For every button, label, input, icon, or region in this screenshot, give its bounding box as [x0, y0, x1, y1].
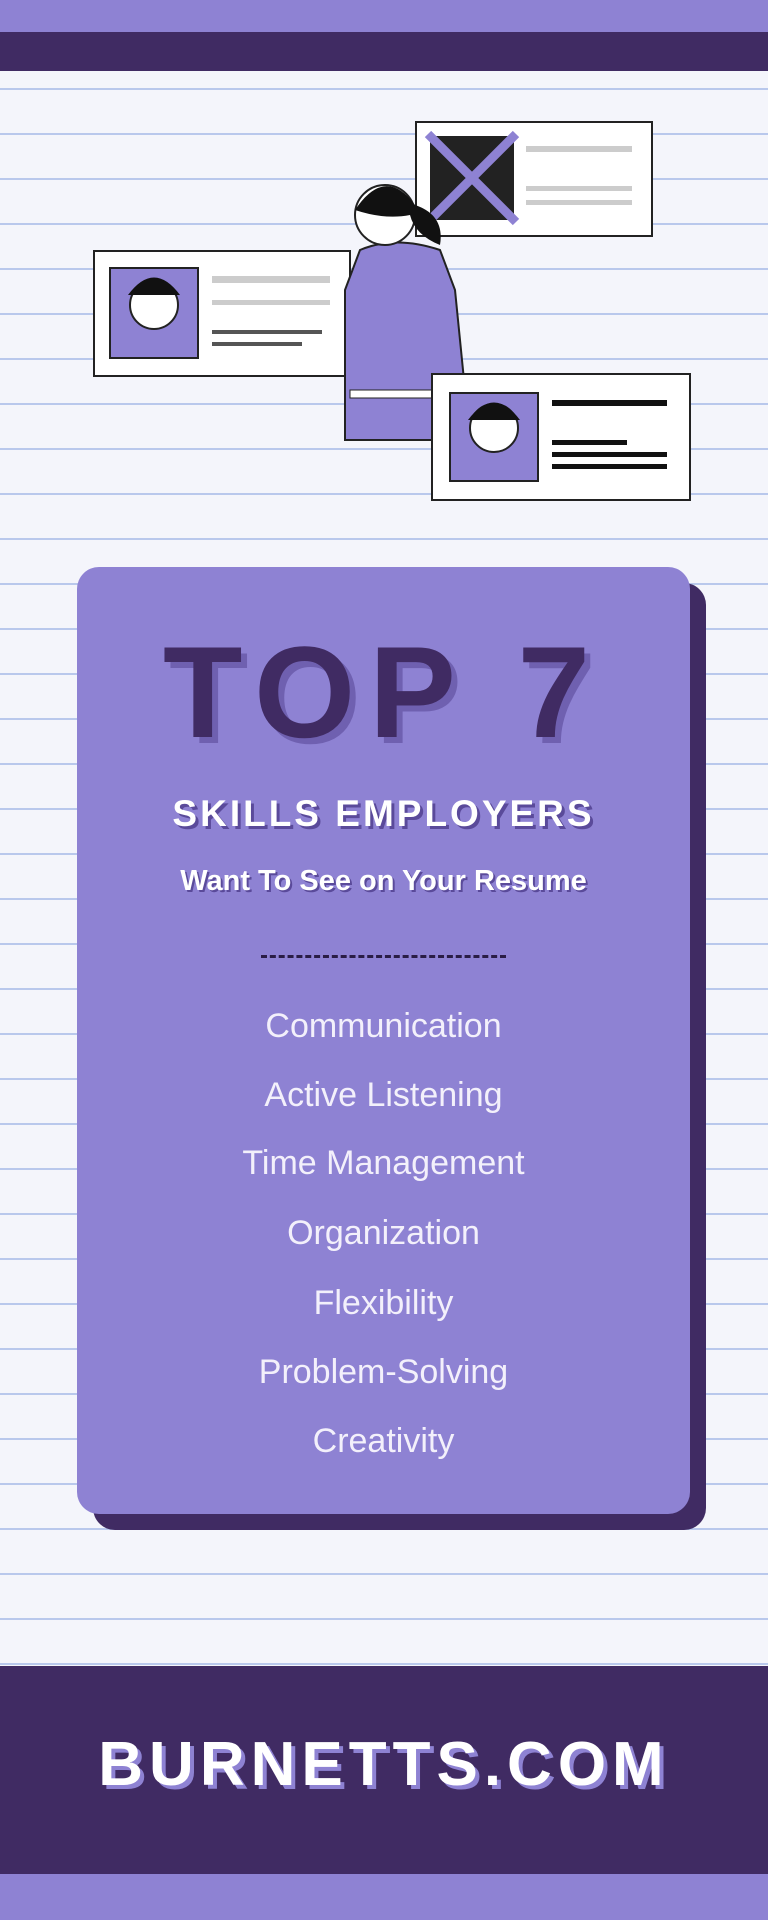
resume card top rejected	[416, 122, 652, 236]
illustration: woman with resumes	[93, 121, 691, 501]
card shadow	[93, 583, 706, 1530]
resume card right	[432, 374, 690, 500]
divider	[261, 955, 506, 958]
top band dark	[0, 32, 768, 71]
tagline: Want To See on Your Resume	[180, 865, 587, 897]
bottom band	[0, 1874, 768, 1920]
subtitle: SKILLS EMPLOYERS	[172, 793, 595, 834]
skills list	[242, 1007, 525, 1460]
skills list: Problem-Solving	[259, 1353, 508, 1391]
skills list: Organization	[287, 1214, 480, 1252]
skills list: Time Management	[242, 1144, 525, 1182]
top band light	[0, 0, 768, 32]
skills list: Communication	[265, 1007, 502, 1045]
footer	[0, 1666, 768, 1874]
main card	[77, 567, 690, 1514]
woman	[345, 185, 470, 440]
skills list: Active Listening	[264, 1076, 503, 1114]
title: TOP 7	[163, 619, 604, 765]
footer text: BURNETTS.COM	[98, 1730, 670, 1799]
skills list: Flexibility	[314, 1284, 453, 1322]
skills list: Creativity	[313, 1422, 454, 1460]
resume card left	[94, 251, 350, 376]
